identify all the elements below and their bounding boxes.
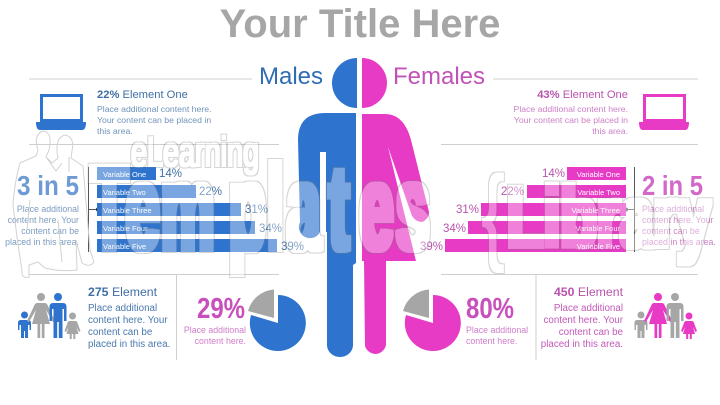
male family text: content can be xyxy=(88,327,153,338)
bar chart: females: Variable Three xyxy=(571,206,620,215)
bar chart: females: 31% xyxy=(456,204,479,216)
panel: male ratio xyxy=(5,170,79,247)
female ratio text: content can be xyxy=(642,226,700,236)
29 percent text: content here. xyxy=(195,336,246,346)
80 percent text: content here. xyxy=(466,336,517,346)
male ratio text: content here. Your xyxy=(8,215,79,225)
male body xyxy=(298,113,356,357)
bar chart: males: Variable Two xyxy=(103,188,146,197)
bar chart: females xyxy=(420,167,634,253)
bar chart: females: 39% xyxy=(420,241,443,253)
watermark: brace: { xyxy=(482,155,504,273)
female family text: content here. Your xyxy=(543,315,624,326)
female body xyxy=(362,114,429,354)
male family text: placed in this area. xyxy=(88,339,170,350)
panel: 29 percent xyxy=(184,290,306,351)
female ratio text: placed in this area. xyxy=(642,237,716,247)
29 percent number: 29% xyxy=(197,293,245,325)
80 percent number: 80% xyxy=(466,293,514,325)
heading: females: Females xyxy=(393,63,485,90)
male element text: this area. xyxy=(97,126,133,136)
panel: 80 percent xyxy=(403,290,528,351)
female family text: content can be xyxy=(559,327,624,338)
female family heading: 450 Element xyxy=(554,285,624,299)
pie chart: males xyxy=(248,290,306,351)
female element text: this area. xyxy=(592,126,628,136)
bar chart: males: 31% xyxy=(245,204,268,216)
male family text: Place additional xyxy=(88,303,157,314)
pie chart: females xyxy=(403,290,461,351)
female family text: Place additional xyxy=(554,303,623,314)
panel: male element one xyxy=(36,89,211,136)
80 percent text: Place additional xyxy=(466,325,528,335)
bar chart: males xyxy=(88,167,304,253)
watermark: people outline xyxy=(13,131,94,277)
panel: male family xyxy=(18,285,170,350)
male ratio text: content can be xyxy=(21,226,79,236)
bar chart: females: 34% xyxy=(443,223,466,235)
29 percent text: Place additional xyxy=(184,325,246,335)
title: Your Title Here xyxy=(220,2,500,46)
male ratio number: 3 in 5 xyxy=(17,170,79,201)
figure: male half xyxy=(298,58,357,357)
icon: female family xyxy=(634,293,697,339)
watermark: Templates: Templates xyxy=(91,141,429,276)
bar chart: males: Variable Five xyxy=(103,242,146,251)
male head xyxy=(332,58,357,108)
female ratio number: 2 in 5 xyxy=(642,170,703,201)
male family text: content here. Your xyxy=(88,315,168,326)
male element heading: 22% Element One xyxy=(97,89,188,101)
panel: female element one xyxy=(514,89,689,136)
male ratio text: placed in this area. xyxy=(5,237,79,247)
female ratio text: content here. Your xyxy=(642,215,713,225)
female element heading: 43% Element One xyxy=(537,89,628,101)
watermark xyxy=(13,128,710,277)
bar chart: males: Variable Three xyxy=(103,206,152,215)
bar chart: males: 22% xyxy=(199,186,222,198)
bar chart: males: 14% xyxy=(159,168,182,180)
bar chart: females: 22% xyxy=(501,186,524,198)
female element text: Place additional content here. xyxy=(514,104,628,114)
watermark: eLearning: eLearning xyxy=(131,128,259,175)
icon: magenta laptop xyxy=(639,94,689,130)
male family heading: 275 Element xyxy=(88,285,158,299)
heading: males: Males xyxy=(259,63,323,90)
male ratio text: Place additional xyxy=(17,204,79,214)
female ratio text: Place additional xyxy=(642,204,704,214)
female head xyxy=(362,58,387,108)
bar chart: males: Variable One xyxy=(103,170,146,179)
figure: female half xyxy=(362,58,429,354)
panel: female family xyxy=(541,285,697,350)
bar chart: males: 39% xyxy=(281,241,304,253)
female family text: placed in this area. xyxy=(541,339,623,350)
bar chart: females: Variable Five xyxy=(577,242,620,251)
icon: blue laptop xyxy=(36,94,86,130)
bar chart: females: Variable Four xyxy=(576,224,620,233)
bar chart: males: Variable Four xyxy=(103,224,148,233)
bar chart: females: Variable One xyxy=(577,170,620,179)
female element text: Your content can be placed in xyxy=(514,115,628,125)
male element text: Your content can be placed in xyxy=(97,115,211,125)
bar chart: females: 14% xyxy=(542,168,565,180)
bar chart: females: Variable Two xyxy=(577,188,620,197)
watermark: the: the xyxy=(430,186,466,246)
icon: male family xyxy=(18,293,80,339)
male element text: Place additional content here. xyxy=(97,104,211,114)
panel: female ratio xyxy=(642,170,716,247)
bar chart: males: 34% xyxy=(259,223,282,235)
